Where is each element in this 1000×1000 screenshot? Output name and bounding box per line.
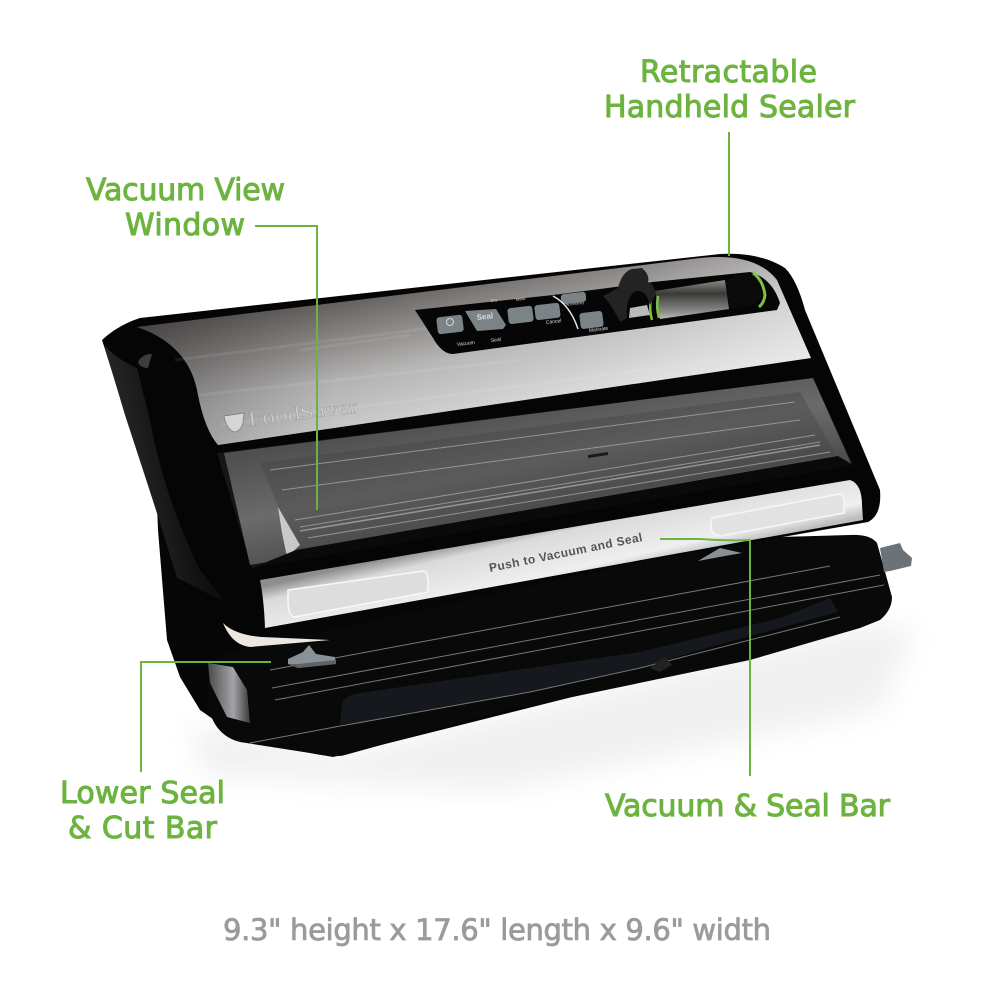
vacuum sealer product illustration: [102, 254, 912, 757]
white gap strip above the tray: [223, 623, 330, 647]
label: lower seal and cut bar: [60, 776, 225, 846]
control labels: Dry: [491, 297, 497, 303]
right bar recess: [711, 494, 844, 536]
label: vacuum view window: [86, 173, 285, 243]
control labels: Accessory: [566, 300, 584, 307]
leader line: lower seal: [141, 662, 271, 772]
control labels: Cancel: [546, 318, 562, 326]
control labels: Seal: [491, 337, 501, 344]
icon: right seal-bar knob: [880, 543, 912, 572]
label: vacuum and seal bar: Vacuum & Seal Bar: [605, 789, 891, 824]
panel: brushed steel top: [137, 257, 811, 445]
control labels: [457, 296, 609, 348]
leader line: vacuum seal bar: [660, 539, 750, 776]
handheld sealer: [603, 268, 765, 322]
rear body base: [157, 500, 640, 757]
label: retractable handheld sealer: [604, 55, 856, 125]
dimensions caption: 9.3" height x 17.6" length x 9.6" width: [223, 913, 771, 947]
wing highlight: [104, 345, 225, 602]
button: marinate: [579, 311, 604, 329]
leader line: handheld sealer: [728, 132, 730, 256]
label: retractable handheld sealer: Retractable: [640, 55, 817, 90]
label: retractable handheld sealer: Handheld Sealer: [604, 90, 856, 125]
label: vacuum view window: Vacuum View: [86, 173, 285, 208]
label: vacuum view window: Window: [125, 208, 245, 243]
button: cancel: [534, 302, 561, 320]
floor shadow: [190, 625, 915, 790]
logo: FoodSaver: FoodSaver: [247, 396, 359, 431]
button: dry moist: [507, 305, 534, 324]
panel: control strip: Seal: [476, 311, 494, 322]
button: power: [436, 314, 464, 335]
button: accessory: [560, 291, 587, 304]
black lid shell: [102, 254, 880, 640]
leader line: vacuum view window: [255, 226, 317, 510]
logo: FoodSaver: [224, 396, 359, 432]
tray: lower open drawer: [207, 535, 912, 756]
icon: left cut-bar knob: [288, 645, 336, 668]
panel: control strip: [415, 268, 780, 354]
left bar recess: [288, 571, 428, 617]
control labels: Moist: [516, 296, 526, 302]
control labels: Vacuum: [457, 340, 475, 348]
panel: vacuum view window: [217, 378, 853, 568]
label: lower seal and cut bar: & Cut Bar: [68, 811, 218, 846]
label: lower seal and cut bar: Lower Seal: [60, 776, 225, 811]
bar label: Push to Vacuum and Seal: [488, 530, 643, 575]
vacuum and seal bar: [260, 480, 863, 628]
button: seal: [465, 309, 506, 331]
control labels: Marinate: [589, 326, 609, 334]
